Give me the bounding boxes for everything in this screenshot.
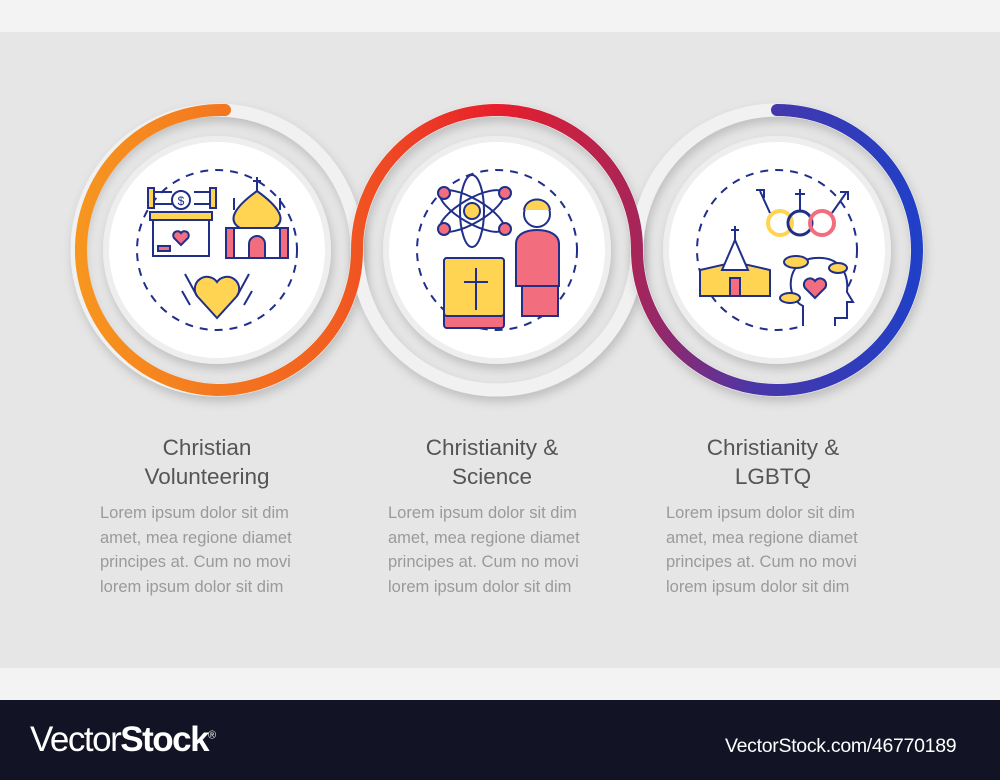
text block 3: lorem ipsum dolor sit dim [666,578,849,596]
text block 2: amet, mea regione diamet [388,528,580,546]
text block 3 [666,504,858,596]
title: Christian Volunteering [144,435,270,489]
text block 1: Lorem ipsum dolor sit dim [100,504,289,522]
title: Christianity & LGBTQ: LGBTQ [735,464,811,489]
title: Christianity & Science: Christianity & [426,435,558,460]
text block 1: lorem ipsum dolor sit dim [100,578,283,596]
gradient snake ring [81,110,917,390]
icon: lgbtq [697,170,857,330]
background rings [77,110,917,390]
footer [0,700,1000,780]
title: Christianity & LGBTQ [707,435,839,489]
title: Christianity & Science: Science [452,464,532,489]
white discs [103,136,891,364]
text block 2: lorem ipsum dolor sit dim [388,578,571,596]
text block 1: amet, mea regione diamet [100,528,292,546]
title: Christianity & LGBTQ: Christianity & [707,435,839,460]
text block 3: amet, mea regione diamet [666,528,858,546]
text block 2 [388,504,580,596]
icon: volunteering: $ [178,194,185,208]
logo: VectorStock® [30,720,215,759]
text block 2: Lorem ipsum dolor sit dim [388,504,577,522]
top band [0,0,1000,32]
text block 3: principes at. Cum no movi [666,553,857,571]
text block 2: principes at. Cum no movi [388,553,579,571]
text block 1: principes at. Cum no movi [100,553,291,571]
icon: volunteering [137,170,297,330]
icon: science [417,170,577,330]
title: Christianity & Science [426,435,558,489]
text block 1 [100,504,292,596]
url: VectorStock.com/46770189 [725,735,956,757]
text block 3: Lorem ipsum dolor sit dim [666,504,855,522]
title: Christian Volunteering: Christian [163,435,251,460]
title: Christian Volunteering: Volunteering [144,464,270,489]
